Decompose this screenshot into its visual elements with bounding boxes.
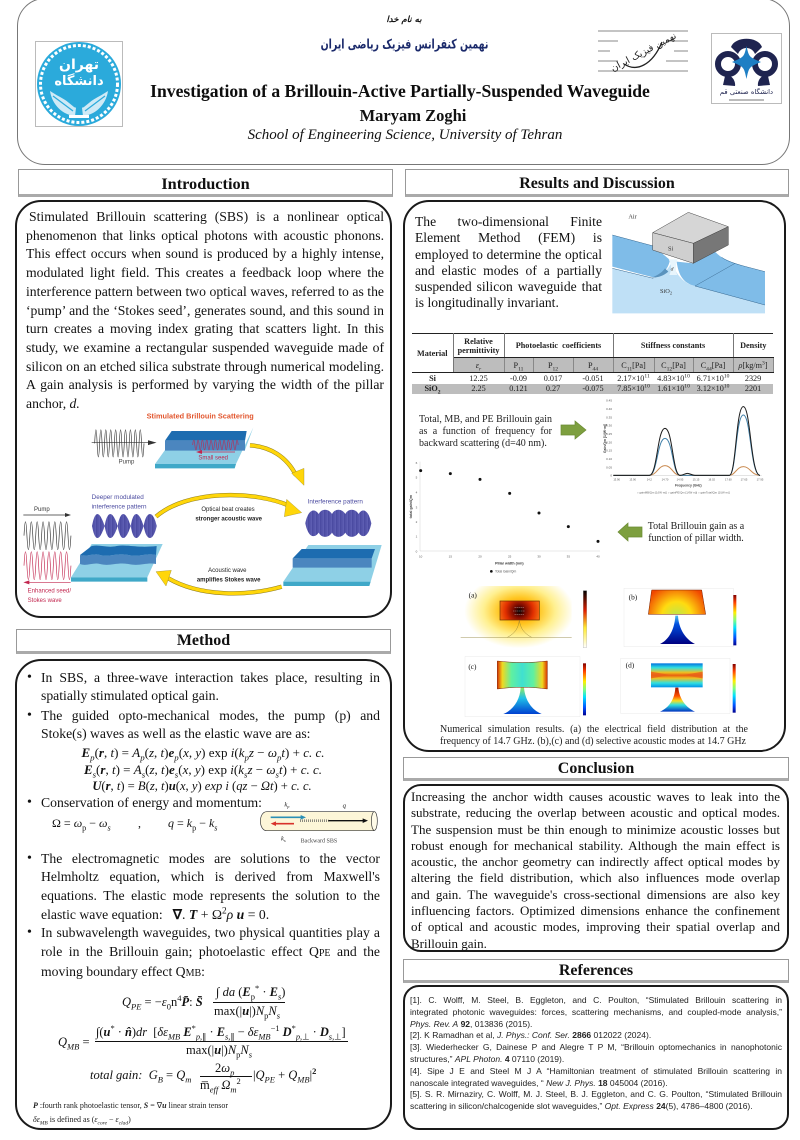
text: conservation: Conservation of energy and momentum:	[41, 795, 262, 810]
equation: Q_PE: ∫ da (Ep* · Es)	[216, 983, 285, 1002]
text: introduction body: turn creates a moving index grating that scatters light. In this	[26, 321, 384, 336]
panel: references	[403, 985, 789, 1130]
pump wave	[92, 430, 155, 457]
logo: University of Tehran: دانشگاه	[54, 73, 104, 89]
chart: gain vs frequency: 16.02	[708, 477, 716, 481]
chart: gain vs frequency: 13.90	[629, 477, 637, 481]
deep interference packets	[92, 514, 157, 538]
yellow arrow 3	[156, 570, 282, 593]
equation: Q_PE: QPE = −ε0n4P̄: S̄	[122, 993, 203, 1012]
text: pillar width caption: function of pillar width.	[648, 533, 744, 544]
diagram: backward SBS: q	[343, 803, 347, 810]
figure: stimulated Brillouin scattering cycle: amplifies Stokes wave	[197, 577, 261, 583]
text: subwavelength waveguides	[41, 925, 380, 979]
equation: total gain	[90, 1061, 316, 1094]
caption labels: interference pattern	[92, 503, 147, 510]
equation: elastic wave: U(r, t) = B(z, t)u(x, y) exp i (qz − Ωt) + c. c.	[92, 779, 312, 793]
text: guided modes: Stoke(s) waves as well as the elastic wave are as:	[41, 726, 310, 741]
figure: waveguide schematic	[612, 212, 765, 314]
chart: gain vs frequency: 0.40	[606, 407, 612, 411]
text: FEM description: The two-dimensional Finite	[415, 214, 602, 229]
shallow interference packets	[305, 510, 371, 537]
left slab with deep modulation	[71, 544, 163, 577]
equation: momentum conservation: q = kp − ks	[168, 816, 217, 832]
plot (b) acoustic mode: (b)	[629, 592, 638, 601]
text: gain vs frequency caption: backward scattering (d=40 nm).	[419, 438, 547, 449]
plot (c) acoustic mode	[465, 657, 586, 717]
text: gain vs frequency caption	[419, 414, 552, 449]
heading: Introduction	[18, 169, 393, 197]
text: three-wave interaction: In SBS, a three-wave interaction takes place, resulting in	[41, 670, 380, 684]
chart: gain vs frequency: 0.10	[606, 457, 612, 461]
author: Maryam Zoghi	[360, 106, 466, 125]
chart: total gain vs pillar width: 1	[416, 535, 418, 539]
yellow arrow 2	[156, 495, 302, 517]
text: conclusion body: of optical and acoustic modes, improving their spatial overlap and	[411, 919, 780, 934]
chart: gain vs frequency: Gain/Qm [1/(W·m)]	[603, 424, 607, 453]
text: guided modes: The guided opto-mechanical modes, the pump (p) and	[41, 708, 380, 722]
chart: gain vs frequency: ○ gainMB/Qm [1/(W·m)] ○ gainPE/Qm [1/(W·m)] ○ gainTotal/Qm [1/(W·m)]	[637, 491, 730, 495]
text: reference list	[410, 995, 782, 1111]
figure: stimulated Brillouin scattering cycle: Acoustic wave	[208, 568, 247, 574]
plot (d) acoustic mode	[621, 658, 736, 713]
table: material parameters: 7.85×1010	[617, 384, 650, 393]
affiliation: School of Engineering Science, University of Tehran	[248, 127, 562, 143]
table: material parameters: 3.12×1010	[697, 384, 729, 393]
panel: conclusion	[403, 784, 789, 952]
table: material parameters: εr	[476, 360, 481, 372]
table: material parameters: 12.25	[469, 374, 488, 383]
text: reference list: [2]. K Ramadhan et al, J. Phys.: Conf. Ser. 2866 012022 (2024).	[410, 1030, 651, 1040]
text: conclusion body: influencing factors. Optimized dimensions enhance the confinement	[411, 903, 780, 918]
text: introduction body: ‘pump’ and the ‘Stokes seed’, generates sound, and this sound in	[26, 303, 384, 318]
text: conclusion body: Increasing the anchor width causes acoustic waves to leak into the	[411, 789, 780, 804]
figure: stimulated Brillouin scattering cycle: Optical beat creates	[201, 507, 255, 513]
figure: stimulated Brillouin scattering cycle: Enhanced seed/	[28, 589, 71, 595]
chart: gain vs frequency: 17.65	[741, 477, 748, 481]
text: gain vs frequency caption: as a function of frequency for	[419, 426, 552, 437]
figure: stimulated Brillouin scattering cycle: Small seed	[198, 456, 228, 462]
logo: University of Tehran: تهران	[59, 57, 99, 73]
equation: energy conservation: Ω = ωp − ωs	[52, 816, 111, 832]
text: introduction body: anchor, d.	[26, 396, 80, 411]
text: simulation caption	[440, 724, 748, 747]
text: electromagnetic modes: The electromagnetic modes are solutions to the vector	[41, 850, 380, 866]
chart: total gain vs pillar width: 3	[416, 505, 418, 509]
arrow: right to frequency chart	[560, 420, 586, 440]
text: three-wave interaction	[41, 670, 380, 703]
heading: References	[403, 959, 789, 983]
chart: gain vs frequency: 14.95	[677, 477, 684, 481]
diagram: backward SBS: k	[281, 836, 284, 843]
chart: total gain vs pillar width: 30	[537, 554, 541, 558]
heading: Results and Discussion: Results and Discussion	[519, 175, 675, 192]
logo: University of Tehran	[35, 41, 123, 127]
text: conclusion body: acoustic, the anchor geometry can indirectly affect optical modes by	[411, 854, 780, 869]
text: subwavelength waveguides: moving boundary effect QMB:	[41, 964, 205, 979]
table: material parameters: C12[Pa]	[661, 360, 686, 372]
chart: total gain vs pillar width: 2	[416, 520, 418, 524]
text: gain vs frequency caption: Total, MB, and PE Brillouin gain	[419, 414, 552, 425]
note: tensor definitions: P :fourth rank photoelastic tensor, S = ∇u linear strain tensor	[33, 1101, 228, 1110]
diagram: backward SBS	[260, 802, 378, 845]
text: reference list: integrated photonic waveguides: forces, scattering mechanisms, and coupled-mode analysis,”	[410, 1007, 782, 1017]
text: conclusion body: robust enough for mechanical stability. Although the main effect is	[411, 838, 780, 853]
table: material parameters: C44[Pa]	[701, 360, 725, 372]
equation: total gain: m̅eff Ωm2	[200, 1076, 241, 1094]
table: material parameters: C11[Pa]	[621, 360, 646, 372]
text: simulation caption: Numerical simulation results. (a) the electrical field distribution at the	[440, 724, 748, 735]
bullet marker 1: •	[27, 670, 32, 685]
text: introduction body: This effect occurs when sound is produced by a highly intense,	[26, 246, 384, 261]
diagram: backward SBS: k	[284, 802, 287, 809]
text: conclusion body: altering the field distribution, which also influences mode overlap	[411, 870, 780, 885]
text: reference list: structures,” APL Photon. 4 07110 (2019).	[410, 1054, 564, 1064]
text: FEM description	[415, 214, 602, 310]
table: material parameters: 6.71×1010	[697, 373, 729, 383]
text: introduction body: phenomenon that links optical photons with acoustic phonons.	[26, 228, 384, 243]
chart: total gain vs pillar width: 25	[508, 554, 512, 558]
chart: gain vs frequency: 17.95	[757, 477, 764, 481]
table: material parameters: Density	[740, 341, 766, 350]
right slab	[283, 545, 382, 582]
heading: References: References	[559, 962, 633, 979]
text: reference list: [3]. Wiederhecker G, Dainese P and Alegre T P M, “Brillouin optomechanics in nanophotonic	[410, 1042, 782, 1052]
text: reference list: [4]. Sipe J E and Steel M J A “Hamiltonian treatment of stimulated Brillouin scattering in	[410, 1066, 782, 1076]
text: conclusion body: The suspension must be thin enough to minimize acoustic losses but	[411, 822, 780, 837]
chart: total gain vs pillar width: 0	[416, 549, 418, 553]
chart: gain vs frequency: 13.90	[613, 477, 621, 481]
chart: gain vs frequency: 0.20	[606, 440, 612, 444]
heading: Results and Discussion	[405, 169, 789, 197]
equation: Q_PE	[122, 983, 285, 1020]
equation: Q_MB: QMB =	[58, 1035, 90, 1052]
text: simulation caption: frequency of 14.7 GHz. (b),(c) and (d) selective acoustic modes at 14.7 GHz	[440, 736, 746, 747]
text: introduction body: interference pattern between two optical waves, referred to as the	[26, 284, 384, 299]
plot (c) acoustic mode: (c)	[468, 662, 477, 671]
logo: Qom University of Technology: دانشگاه صنعتی قم	[720, 87, 773, 96]
text: reference list: [1]. C. Wolff, M. Steel, B. Eggleton, and C. Poulton, “Stimulated Brillouin scattering in	[410, 995, 782, 1005]
equation: total gain: total gain: GB = Qm	[90, 1068, 191, 1084]
caption labels: Interference pattern	[308, 498, 363, 505]
text: conclusion body: Brillouin gain.	[411, 936, 487, 951]
table: material parameters: 4.83×1010	[657, 373, 690, 383]
equation: Q_MB	[58, 1023, 348, 1060]
chart: gain vs frequency: 14.70	[662, 477, 669, 481]
chart: gain vs frequency: 0.05	[606, 465, 612, 469]
figure: waveguide schematic: 2	[670, 290, 672, 295]
table: material parameters: Photoelastic coefficients	[516, 341, 601, 350]
text: conclusion body: substrate, reducing the overlap between acoustic and optical modes.	[411, 805, 780, 820]
diagram: backward SBS: p	[286, 804, 290, 809]
chart: gain vs frequency	[603, 399, 764, 495]
text: subwavelength waveguides: role in the Brillouin gain; photoelastic effect QPE and the	[41, 944, 380, 959]
table: material parameters: Stiffness constants	[641, 341, 705, 350]
bullet marker 2: •	[27, 708, 32, 723]
text: reference list: scattering in silicon/chalcogenide slot waveguides,” Opt. Express 24(5), 4786–4800 (2016).	[410, 1101, 753, 1111]
figure: stimulated Brillouin scattering cycle: stronger acoustic wave	[195, 516, 263, 522]
figure: stimulated Brillouin scattering cycle	[23, 411, 382, 604]
separator comma: ,	[138, 816, 141, 830]
heading: invocation: به نام خدا	[386, 15, 422, 25]
table: material parameters: 2.25	[471, 384, 486, 393]
text: reference list: [5]. S. R. Mirnaziry, C. Wolff, M. J. Steel, B. J. Eggleton, and C. G. Poulton, “Stimulated Brillouin	[410, 1089, 782, 1099]
text: introduction body: modulated light field. This creates a feedback loop where the	[26, 265, 384, 280]
table: material parameters: -0.09	[510, 374, 527, 383]
text: guided modes	[41, 708, 380, 741]
chart: total gain vs pillar width: 35	[567, 554, 570, 558]
text: introduction body: A gain analysis is performed by varying the width of the pillar	[26, 377, 384, 392]
text: introduction body: Stimulated Brillouin scattering (SBS) is a nonlinear optical	[29, 209, 384, 224]
chart: total gain vs pillar width	[409, 461, 600, 574]
left pump and Stokes waves: Pump	[34, 507, 50, 513]
table: material parameters: Relative	[464, 336, 493, 346]
caption labels: Deeper modulated	[92, 494, 144, 501]
chart: gain vs frequency: Frequency (GHz)	[675, 484, 702, 488]
table: material parameters: P44	[588, 360, 598, 372]
chart: total gain vs pillar width: 10	[419, 554, 423, 558]
table: material parameters: 0.017	[544, 374, 562, 383]
text: electromagnetic modes: equations. The elastic mode represents the solution to the	[41, 888, 380, 903]
chart: total gain vs pillar width: 4	[416, 490, 418, 494]
table: material parameters: 2.17×1011	[617, 373, 650, 383]
chart: total gain vs pillar width: Pillar width (nm)	[495, 561, 524, 565]
text: FEM description: and elastic modes of a partially	[415, 263, 602, 278]
table: material parameters: 0.27	[546, 384, 560, 393]
equation: pump field: Ep(r, t) = Ap(z, t)ep(x, y) exp i(kpz − ωpt) + c. c.	[81, 745, 325, 763]
top slab	[155, 427, 253, 464]
heading: Method: Method	[177, 632, 230, 649]
note: tensor definitions	[33, 1101, 228, 1127]
text: FEM description: suspended silicon waveguide that	[415, 279, 602, 294]
logo: conference calligraphy: نهمین فیزیک ایران	[609, 30, 678, 74]
text: pillar width caption	[648, 521, 744, 544]
table: material parameters: -0.075	[582, 384, 604, 393]
equation: Q_MB: max(|u|)NpNs	[186, 1043, 252, 1060]
caption labels	[92, 494, 363, 510]
chart: gain vs frequency: 17.60	[725, 477, 732, 481]
heading: Conclusion	[403, 757, 789, 781]
panel: header	[17, 0, 790, 165]
panel: method	[15, 659, 392, 1130]
equation: total gain: 2ωp	[215, 1061, 234, 1078]
yellow arrow 1	[250, 445, 304, 485]
chart: total gain vs pillar width: 5	[416, 476, 418, 480]
title: Investigation of a Brillouin-Active Partially-Suspended Waveguide	[150, 81, 650, 101]
table: material parameters: Material	[417, 348, 447, 358]
text: subwavelength waveguides: In subwavelength waveguides, two physical quantities play a	[41, 925, 380, 940]
chart: gain vs frequency: 0	[610, 474, 612, 478]
chart: gain vs frequency: 0.35	[606, 415, 612, 419]
text: introduction body: study, we examine a rectangular suspended waveguide made of	[26, 340, 384, 355]
panel: results	[403, 200, 786, 752]
chart: total gain vs pillar width: 6	[416, 461, 418, 465]
figure: waveguide schematic: SiO	[660, 288, 670, 295]
table: material parameters: 0.121	[509, 384, 528, 393]
plot (d) acoustic mode: (d)	[626, 661, 635, 670]
heading: Method	[16, 629, 391, 654]
text: conclusion body: and gain. The waveguide's cross-sectional dimensions are also key	[411, 887, 780, 902]
figure: stimulated Brillouin scattering cycle: Acoustic wave	[310, 570, 349, 576]
table: material parameters: P12	[548, 360, 558, 372]
chart: gain vs frequency: 0.25	[606, 432, 612, 436]
table: material parameters: 2329	[745, 374, 761, 383]
table: material parameters: -0.051	[582, 374, 604, 383]
chart: total gain vs pillar width: 20	[478, 554, 482, 558]
chart: gain vs frequency: 0.30	[606, 424, 612, 428]
text: pillar width caption: Total Brillouin gain as a	[648, 521, 744, 532]
plot (a) electric field: (a)	[469, 590, 477, 599]
figure: waveguide schematic: Air	[628, 214, 638, 221]
equation: Q_MB: ∫(u* · n̂)dr [δεMB E* p,∥ · Es,∥ − δεMB−1 D* p,⊥ · Ds,⊥]	[96, 1023, 346, 1041]
text: introduction body: silicon on an etched silica substrate through numerical modeling.	[26, 359, 384, 374]
panel: introduction	[15, 200, 392, 618]
chart: gain vs frequency: 15.15	[693, 477, 700, 481]
text: conclusion body	[411, 789, 780, 951]
text: introduction body	[26, 209, 384, 411]
label: figure title: Stimulated Brillouin Scattering	[147, 411, 254, 420]
arrow: left to scatter chart	[618, 522, 642, 542]
text: FEM description: is longitudinally invariant.	[415, 295, 559, 310]
plot (a) electric field	[461, 586, 587, 648]
diagram: backward SBS: Backward SBS	[301, 839, 337, 845]
table: material parameters: Si	[429, 374, 436, 383]
text: electromagnetic modes	[41, 850, 380, 922]
text: three-wave interaction: spatially stimulated optical gain.	[41, 688, 219, 703]
heading: conference name: نهمین کنفرانس فیزیک ریاضی ایران	[321, 36, 488, 52]
table: material parameters: 1.61×1010	[657, 384, 690, 393]
logo: Qom University of Technology	[711, 33, 782, 104]
equation: Stokes field: Es(r, t) = As(z, t)es(x, y) exp i(ksz − ωst) + c. c.	[84, 762, 322, 780]
equation: total gain: |QPE + QMB|2	[253, 1066, 316, 1084]
heading: Introduction: Introduction	[161, 174, 250, 193]
diagram: backward SBS: s	[284, 838, 286, 843]
text: FEM description: Element Method (FEM) is	[415, 230, 602, 245]
table: material parameters	[412, 333, 774, 394]
text: reference list: Phys. Rev. A 92, 013836 (2015).	[410, 1019, 532, 1029]
text: FEM description: employed to determine the optical	[415, 247, 602, 262]
table: material parameters: P11	[514, 360, 523, 372]
text: electromagnetic modes: Helmholtz equation, which is derived from Maxwell's	[41, 869, 380, 884]
text: reference list: nanoscale integrated waveguides, “ New J. Phys. 18 045004 (2016).	[410, 1078, 668, 1088]
chart: total gain vs pillar width: 40	[596, 554, 600, 558]
figure: stimulated Brillouin scattering cycle: Pump	[119, 459, 135, 465]
equation: Q_PE: max(|u|)NpNs	[214, 1004, 280, 1020]
chart: total gain vs pillar width: Total Gain/Qm	[495, 570, 516, 574]
note: tensor definitions: δεMB is defined as (εcore − εclad)	[33, 1115, 131, 1127]
figure: simulation results	[460, 586, 736, 717]
table: material parameters: ρ[kg/m3]	[739, 360, 768, 370]
chart: gain vs frequency: 14.2	[647, 477, 652, 481]
chart: total gain vs pillar width: total gain/Qm	[409, 494, 413, 518]
table: material parameters: 2201	[745, 384, 761, 393]
heading: Conclusion: Conclusion	[558, 760, 634, 777]
chart: gain vs frequency: 0.45	[606, 399, 612, 403]
figure: waveguide schematic: d	[671, 266, 674, 272]
plot (b) acoustic mode	[624, 588, 736, 647]
figure: stimulated Brillouin scattering cycle: Stokes wave	[28, 598, 62, 604]
table: material parameters: permittivity	[458, 346, 499, 354]
bullet marker 3: •	[27, 795, 32, 810]
text: electromagnetic modes: elastic wave equation: ∇. T + Ω2ρ u = 0.	[41, 906, 269, 922]
figure: waveguide schematic: Si	[668, 245, 674, 252]
bullet marker 4: •	[27, 851, 32, 866]
chart: gain vs frequency: 0.15	[606, 449, 612, 453]
chart: total gain vs pillar width: 15	[449, 554, 452, 558]
bullet marker 5: •	[27, 925, 32, 940]
